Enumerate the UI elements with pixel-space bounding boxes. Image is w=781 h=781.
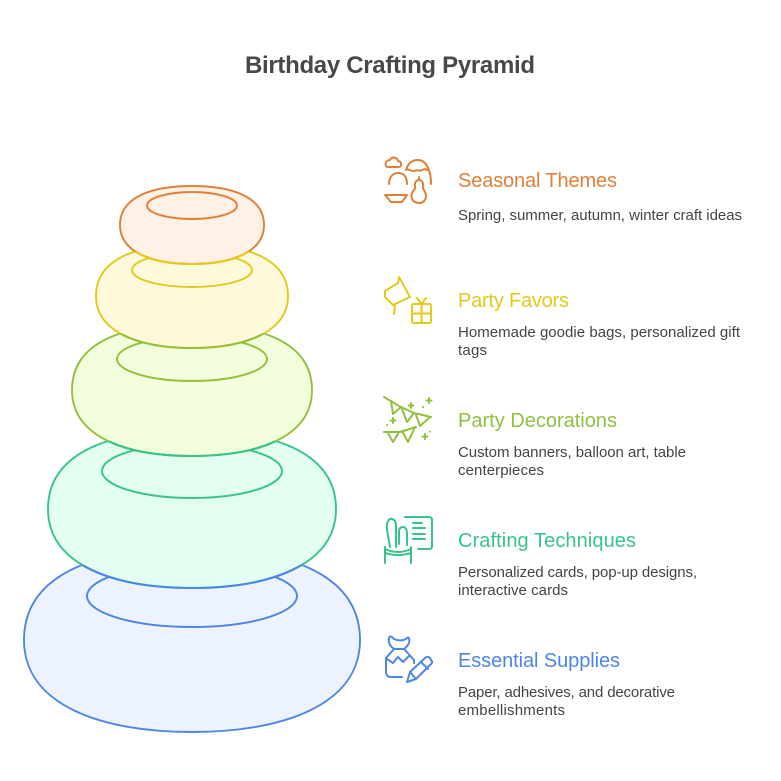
icon: glue jar and pencil bbox=[386, 636, 432, 682]
heading: Party Decorations bbox=[458, 410, 617, 432]
description: Personalized cards, pop-up designs, bbox=[458, 564, 697, 581]
item: party favors bbox=[385, 277, 741, 359]
item: essential supplies bbox=[386, 636, 675, 719]
heading: Essential Supplies bbox=[458, 650, 620, 672]
item: crafting techniques bbox=[385, 517, 697, 599]
icon: pennant and gift bbox=[385, 277, 431, 323]
tier 3: party decorations ring bbox=[72, 324, 312, 456]
tier 5: essential supplies ring bbox=[24, 548, 360, 732]
description: Custom banners, balloon art, table bbox=[458, 444, 686, 461]
description: Spring, summer, autumn, winter craft ideas bbox=[458, 207, 742, 224]
tier 4: crafting techniques ring bbox=[48, 430, 336, 588]
description: Homemade goodie bags, personalized gift bbox=[458, 324, 741, 341]
description line 2: centerpieces bbox=[458, 462, 544, 479]
item: seasonal themes bbox=[385, 157, 742, 224]
description line 2: tags bbox=[458, 342, 487, 359]
description: Paper, adhesives, and decorative bbox=[458, 684, 675, 701]
icon: bunting bbox=[384, 397, 432, 442]
description line 2: interactive cards bbox=[458, 582, 568, 599]
icon: pen pot and document bbox=[385, 517, 432, 563]
heading: Party Favors bbox=[458, 290, 569, 312]
icon: seasons bbox=[385, 157, 431, 203]
title: Birthday Crafting Pyramid bbox=[245, 52, 535, 79]
tier 2: party favors ring bbox=[96, 244, 288, 348]
heading: Crafting Techniques bbox=[458, 530, 636, 552]
heading: Seasonal Themes bbox=[458, 170, 617, 192]
tier 1: seasonal themes ring bbox=[120, 186, 264, 264]
stacked pyramid diagram bbox=[24, 186, 360, 732]
description line 2: embellishments bbox=[458, 702, 565, 719]
item: party decorations bbox=[384, 397, 686, 479]
